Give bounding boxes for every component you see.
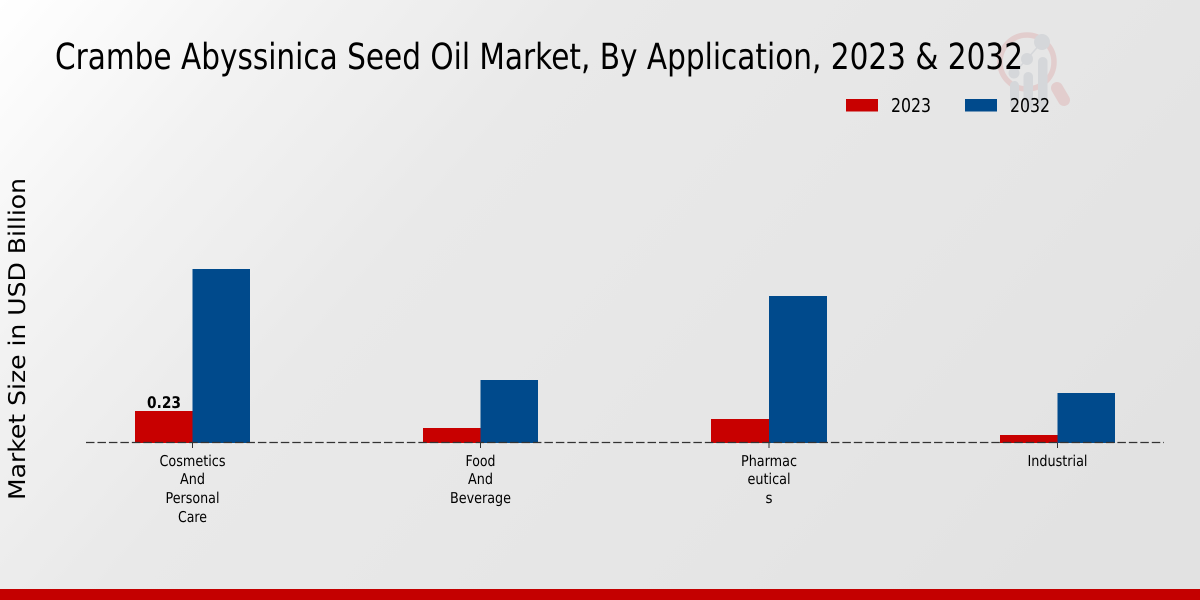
x label: Cosmetics And Personal Care <box>160 452 226 526</box>
x label: Pharmaceuticals: s <box>766 489 773 507</box>
axis baseline <box>86 442 1164 444</box>
bars: Cosmetics And Personal Care <box>135 269 250 443</box>
legend label 2023: 2023 <box>891 95 931 117</box>
footer bar <box>0 589 1200 600</box>
x label: Pharmaceuticals <box>741 452 797 507</box>
value label: 0.23 <box>147 393 181 412</box>
x label: Cosmetics And Personal Care: Personal <box>166 489 220 507</box>
bar chart <box>86 269 1164 448</box>
x label: Cosmetics And Personal Care: Care <box>178 508 207 526</box>
x label: Cosmetics And Personal Care: And <box>180 470 205 488</box>
y-axis title: Market Size in USD Billion <box>5 178 31 500</box>
x label: Food And Beverage <box>450 452 511 507</box>
legend <box>846 95 1050 117</box>
watermark logo <box>1000 34 1064 110</box>
x label: Cosmetics And Personal Care: Cosmetics <box>160 452 226 470</box>
title: Crambe Abyssinica Seed Oil Market, By Application, 2023 & 2032 <box>55 37 1023 78</box>
x label: Industrial: Industrial <box>1028 452 1088 470</box>
legend swatch 2023 <box>846 99 878 112</box>
x label: Food And Beverage: Beverage <box>450 489 511 507</box>
x label: Pharmaceuticals: eutical <box>748 470 790 488</box>
bars: Industrial <box>1000 393 1115 443</box>
bars: Food And Beverage <box>423 380 538 443</box>
legend label 2032: 2032 <box>1010 95 1050 117</box>
legend swatch 2032 <box>965 99 997 112</box>
bars: Pharmaceuticals <box>711 296 827 443</box>
x label: Pharmaceuticals: Pharmac <box>741 452 797 470</box>
x label: Food And Beverage: Food <box>466 452 496 470</box>
x label: Food And Beverage: And <box>468 470 493 488</box>
